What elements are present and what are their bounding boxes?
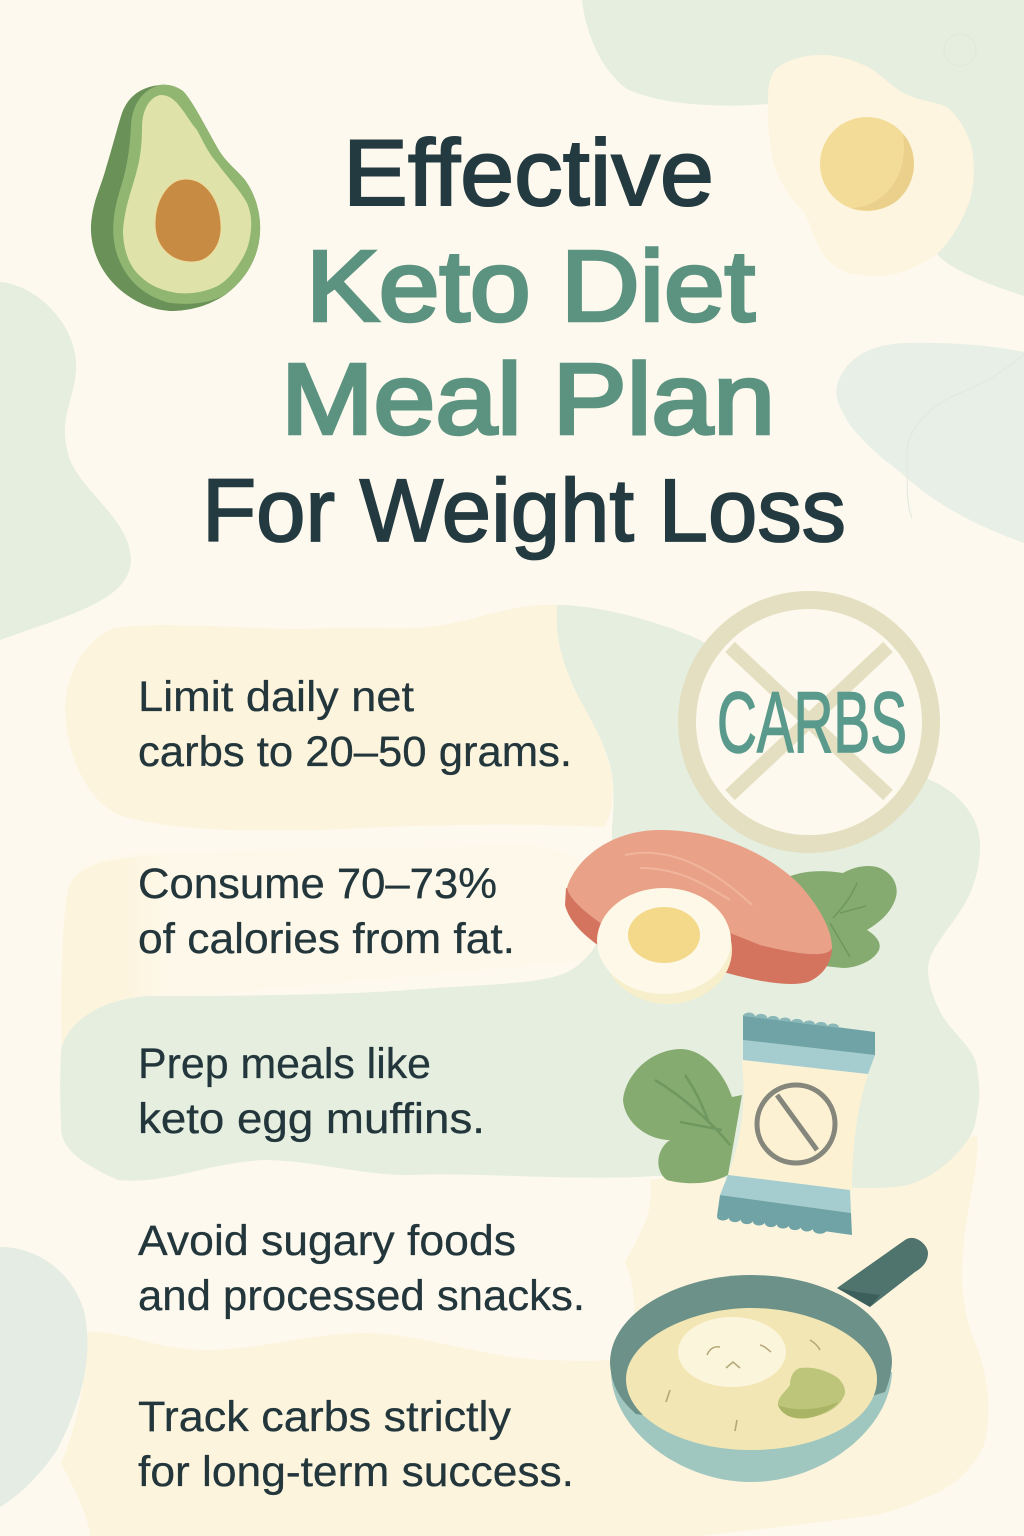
- tip: avoid sugar: [138, 1217, 585, 1320]
- tip: calories from fat: Consume 70–73%: [138, 860, 497, 908]
- tip: track carbs: [138, 1393, 574, 1496]
- icon: leaf behind meat: [788, 866, 897, 968]
- tip: limit carbs: carbs to 20–50 grams.: [138, 728, 572, 776]
- icon: boiled egg slice: [597, 888, 732, 1004]
- tip: avoid sugar: Avoid sugary foods: [138, 1217, 516, 1265]
- icon: frying pan: [610, 1238, 928, 1482]
- title line: For Weight Loss: For Weight Loss: [202, 460, 846, 560]
- tip: track carbs: for long-term success.: [138, 1448, 574, 1496]
- icon: fried egg: [768, 55, 974, 276]
- tip: calories from fat: [138, 860, 515, 963]
- title line: Meal Plan: Meal Plan: [281, 344, 775, 456]
- tip: limit carbs: [138, 673, 572, 776]
- title line: Effective: Effective: [343, 120, 714, 225]
- tip: avoid sugar: and processed snacks.: [138, 1272, 585, 1320]
- icon: snack packet: [717, 1012, 875, 1235]
- tip: prep meals: Prep meals like: [138, 1040, 431, 1088]
- light blue blob lower left: [0, 1247, 88, 1507]
- tip: calories from fat: of calories from fat.: [138, 915, 515, 963]
- tip: prep meals: [138, 1040, 485, 1143]
- tip: prep meals: keto egg muffins.: [138, 1095, 485, 1143]
- tip: track carbs: Track carbs strictly: [138, 1393, 512, 1441]
- icon: salmon slice: [565, 830, 832, 984]
- title: [202, 120, 846, 560]
- icon: no carbs sign: [687, 600, 931, 844]
- icon: spinach leaf: [623, 1049, 742, 1183]
- icon: no carbs sign: CARBS: [717, 675, 907, 771]
- title line: Keto Diet: Keto Diet: [306, 230, 755, 342]
- tip: limit carbs: Limit daily net: [138, 673, 414, 721]
- icon: avocado: [91, 85, 260, 311]
